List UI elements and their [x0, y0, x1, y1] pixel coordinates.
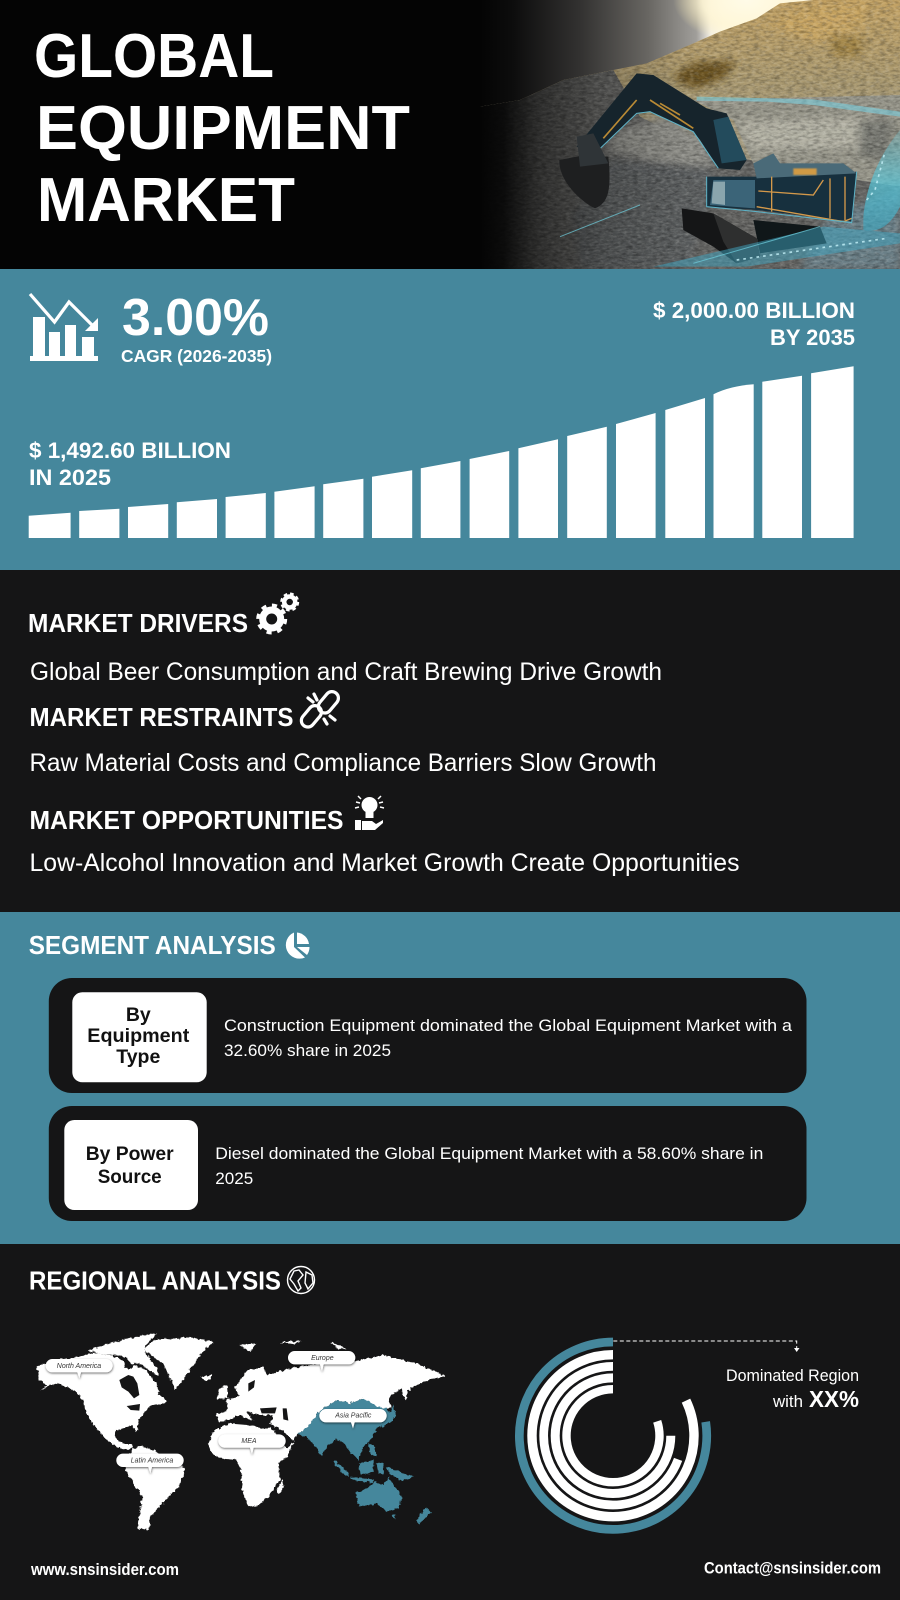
dominated region label [726, 1366, 859, 1412]
CAGR value: 3.00% [122, 289, 269, 347]
dominated region label: with [772, 1392, 803, 1411]
driver text: Global Beer Consumption and Craft Brewing Drive Growth [30, 658, 662, 686]
cab and body [707, 172, 857, 222]
Iceland and northern islands [201, 1341, 347, 1380]
callout labels [57, 1355, 372, 1465]
leader line [613, 1341, 800, 1352]
callout labels: MEA [241, 1438, 257, 1445]
Greenland [143, 1337, 213, 1390]
bar chart [29, 366, 854, 538]
panel: market size [0, 269, 900, 570]
callout labels: Europe [311, 1355, 334, 1362]
card: by power source: By Power [86, 1143, 174, 1165]
world map [36, 1333, 445, 1530]
Australia [355, 1477, 402, 1519]
header background [0, 0, 900, 269]
end value: $ 2,000.00 BILLION [653, 298, 855, 323]
callouts [46, 1351, 387, 1474]
start value: $ 1,492.60 BILLION [29, 438, 231, 463]
restraint text: Raw Material Costs and Compliance Barriers Slow Growth [30, 749, 656, 777]
title: GLOBAL [34, 22, 274, 91]
start value [29, 438, 231, 490]
card: by equipment type: By [126, 1004, 151, 1026]
card: by equipment type: 32.60% share in 2025 [224, 1041, 391, 1060]
card: by power source: Source [98, 1166, 162, 1188]
Asia Pacific mainland [298, 1398, 392, 1460]
Africa [208, 1423, 295, 1507]
heading: market opportunities: MARKET OPPORTUNITIES [30, 805, 344, 835]
title [34, 22, 410, 235]
card: by power source: Diesel dominated the Global Equipment Market with a 58.60% share in [215, 1144, 763, 1163]
icon: gears [258, 594, 298, 632]
end value [653, 298, 855, 350]
callout labels: Asia Pacific [334, 1413, 372, 1420]
icon: idea in hand [355, 796, 384, 830]
New Zealand [417, 1507, 431, 1524]
opportunity text: Low-Alcohol Innovation and Market Growth Create Opportunities [30, 849, 740, 877]
South America [125, 1447, 185, 1530]
Japan [382, 1405, 396, 1427]
dominated region label: Dominated Region [726, 1366, 859, 1385]
card: by equipment type: Equipment [87, 1025, 190, 1047]
card: by power source: 2025 [215, 1169, 253, 1188]
end value: BY 2035 [770, 325, 855, 350]
card: by equipment type: Construction Equipment dominated the Global Equipment Market with a [224, 1016, 793, 1035]
panel: segment analysis [0, 912, 900, 1244]
start value: IN 2025 [29, 465, 111, 490]
title: MARKET [37, 166, 295, 235]
data lines [560, 97, 900, 267]
Madagascar [276, 1480, 284, 1496]
heading: REGIONAL ANALYSIS [29, 1266, 281, 1296]
tracks [682, 208, 760, 263]
icon: broken link [299, 689, 341, 730]
heading: market drivers: MARKET DRIVERS [28, 608, 248, 638]
North America [36, 1353, 167, 1451]
CAGR label: CAGR (2026-2035) [121, 346, 272, 366]
inland seas [119, 1375, 288, 1426]
heading: SEGMENT ANALYSIS [29, 930, 276, 960]
stick and boom [577, 73, 747, 170]
Eurasia excluding APAC [217, 1355, 445, 1440]
panel: market dynamics [0, 570, 900, 912]
header photo: excavator in quarry [480, 0, 900, 269]
Indonesia and Philippines [335, 1443, 413, 1483]
icon: pie chart [286, 932, 310, 959]
icon: globe [288, 1266, 314, 1294]
Arctic islands [87, 1333, 158, 1377]
dominated region label: XX% [809, 1386, 859, 1412]
heading: market restraints: MARKET RESTRAINTS [30, 702, 294, 732]
title: EQUIPMENT [36, 94, 410, 163]
callout labels: Latin America [131, 1458, 173, 1465]
icon: trend chart [30, 294, 98, 361]
footer website: www.snsinsider.com [30, 1561, 179, 1579]
card: by equipment type [49, 978, 807, 1093]
card: by equipment type: Type [116, 1046, 160, 1068]
panel: regional analysis [0, 1244, 900, 1600]
card: by power source [49, 1106, 807, 1221]
UK and Ireland [217, 1385, 228, 1399]
callout labels: North America [57, 1363, 101, 1370]
radial chart [519, 1342, 707, 1529]
bucket [559, 156, 610, 208]
